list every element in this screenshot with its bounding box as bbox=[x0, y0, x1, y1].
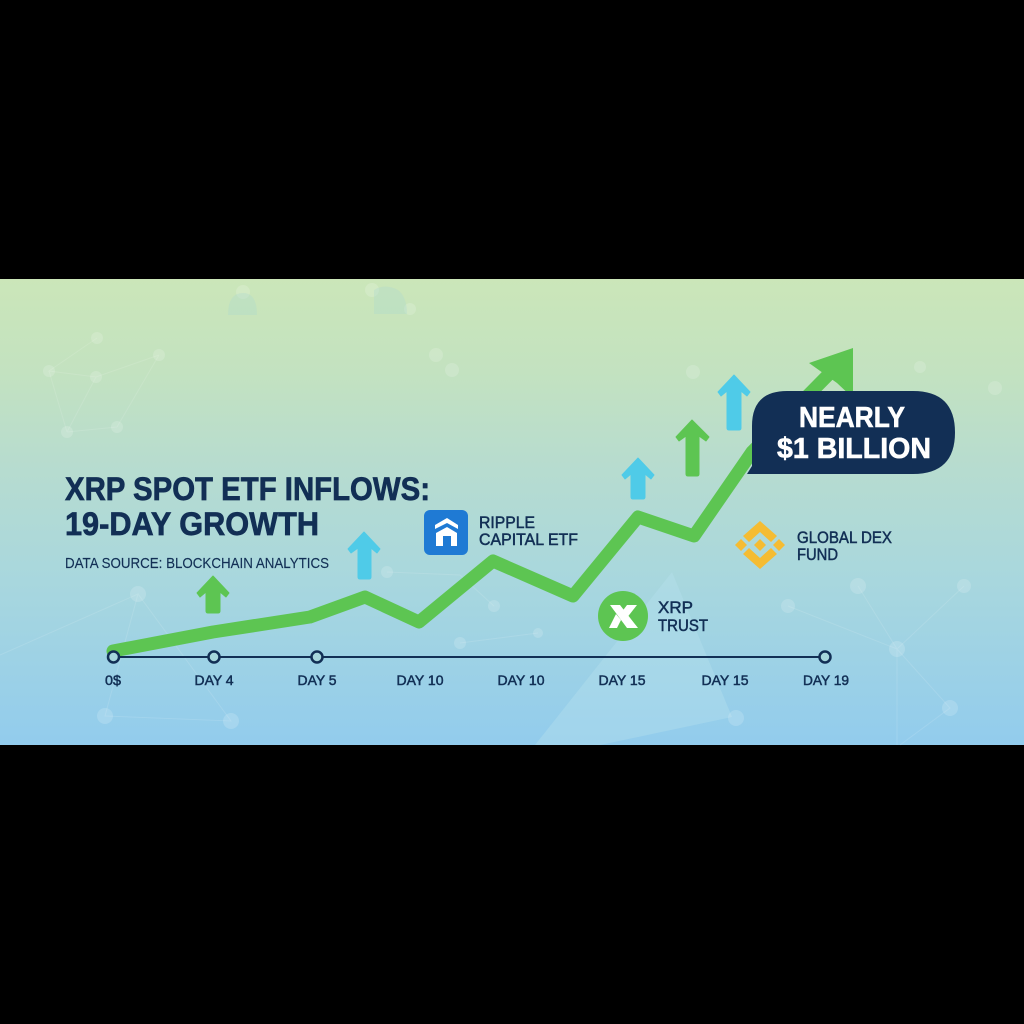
title bbox=[65, 471, 430, 542]
legend: ripple capital etf: RIPPLE bbox=[479, 514, 535, 532]
timeline axis bbox=[105, 652, 849, 688]
legend: global dex fund: GLOBAL DEX bbox=[797, 529, 892, 547]
timeline axis: DAY 5 bbox=[298, 672, 337, 688]
background network pattern bbox=[0, 283, 1002, 745]
timeline axis: DAY 15 bbox=[702, 672, 749, 688]
timeline axis: DAY 19 bbox=[803, 672, 849, 688]
legend: global dex fund bbox=[735, 521, 892, 569]
arrow: green up 1 bbox=[197, 576, 229, 613]
arrow: blue up 3 bbox=[718, 375, 750, 430]
panel: gradient background band bbox=[0, 279, 1024, 745]
callout: nearly $1 billion: $1 BILLION bbox=[777, 433, 931, 465]
legend: xrp trust: TRUST bbox=[658, 617, 708, 635]
legend: xrp trust: XRP bbox=[658, 599, 693, 617]
timeline axis: DAY 15 bbox=[598, 672, 646, 688]
legend: global dex fund: FUND bbox=[797, 546, 838, 564]
icon: diamond logo bbox=[735, 521, 785, 569]
timeline axis: DAY 4 bbox=[194, 672, 234, 688]
data source note: DATA SOURCE: BLOCKCHAIN ANALYTICS bbox=[65, 555, 329, 572]
timeline axis: 0$ bbox=[105, 672, 121, 688]
title: 19-DAY GROWTH bbox=[65, 506, 319, 542]
callout: nearly $1 billion: NEARLY bbox=[799, 402, 905, 434]
legend: xrp trust bbox=[598, 591, 708, 641]
legend: ripple capital etf: CAPITAL ETF bbox=[479, 531, 578, 549]
arrow: green up 2 bbox=[676, 420, 709, 476]
legend: ripple capital etf bbox=[424, 510, 578, 555]
arrow: blue up 2 bbox=[622, 458, 654, 499]
arrow: blue up 1 bbox=[348, 532, 380, 579]
timeline axis: DAY 10 bbox=[498, 672, 545, 688]
timeline axis: DAY 10 bbox=[396, 672, 444, 688]
callout: nearly $1 billion bbox=[747, 391, 955, 474]
growth line with arrowhead bbox=[113, 348, 853, 651]
icon: xrp circle bbox=[598, 591, 648, 641]
icon: ripple house bbox=[424, 510, 468, 555]
title: XRP SPOT ETF INFLOWS: bbox=[65, 471, 430, 507]
